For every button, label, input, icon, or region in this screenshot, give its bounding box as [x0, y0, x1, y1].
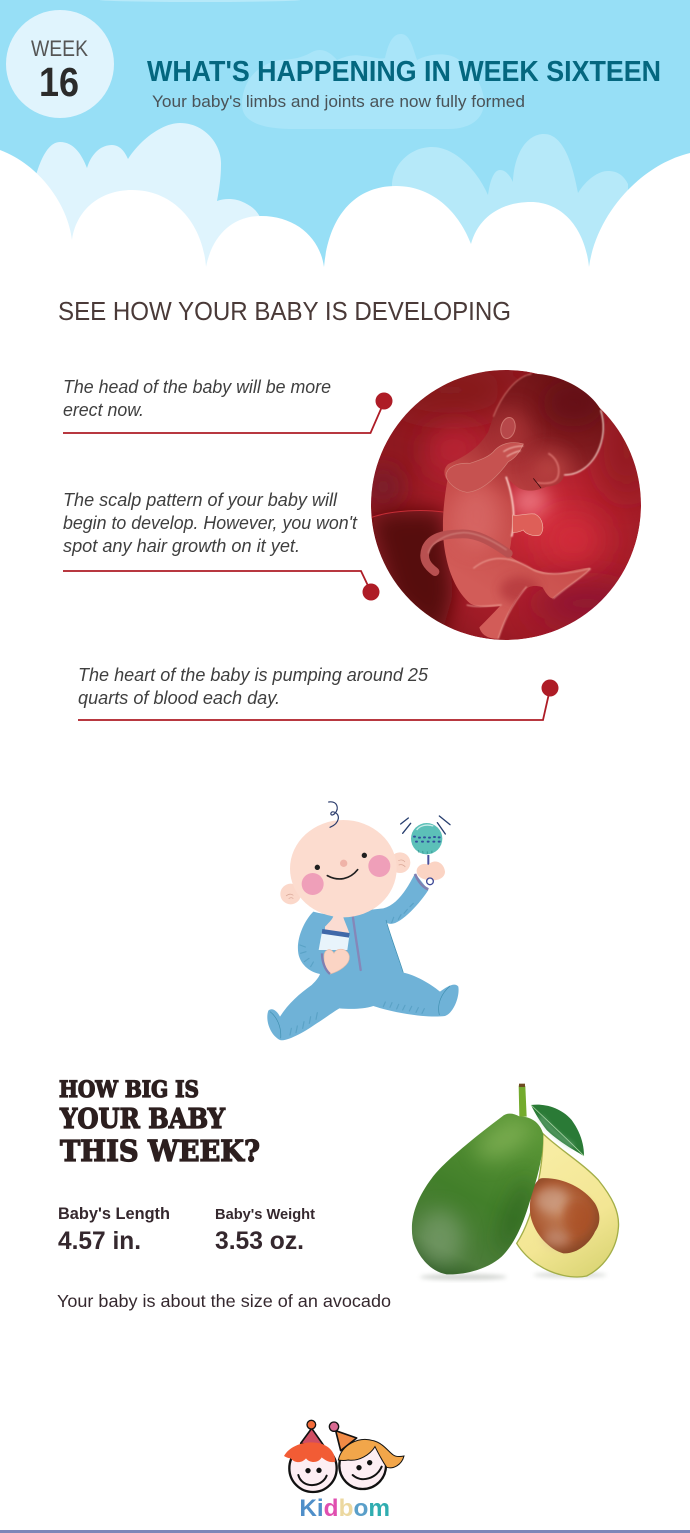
umbilical cord — [425, 534, 508, 572]
nose — [340, 860, 347, 867]
section heading: SEE HOW YOUR BABY IS DEVELOPING — [58, 296, 511, 326]
mouth — [533, 478, 541, 488]
right ear — [390, 852, 410, 873]
leaf vein — [531, 1105, 584, 1156]
bottle band — [322, 931, 349, 935]
rattle ball — [411, 823, 442, 854]
seed reddish patch — [563, 1200, 591, 1233]
girl face — [339, 1442, 386, 1489]
stat: weight — [215, 1206, 315, 1255]
stat label: Baby's Weight — [215, 1206, 315, 1223]
zipper — [353, 915, 361, 970]
hair curl — [329, 802, 338, 827]
pale cloud left — [30, 123, 263, 280]
stat value: 4.57 in. — [58, 1227, 141, 1255]
leader dot — [542, 680, 558, 696]
wordmark: Kidbom — [299, 1495, 390, 1522]
ear — [499, 416, 517, 440]
callout: head — [63, 377, 392, 433]
stem — [519, 1084, 527, 1117]
fingers — [503, 446, 523, 457]
callout line 1: The head of the baby will be more — [63, 377, 331, 397]
question heading — [59, 1077, 260, 1168]
forehead rim light — [493, 374, 532, 417]
rattle dots — [414, 837, 440, 842]
sleeve cuff — [415, 874, 428, 889]
chest glow — [506, 477, 514, 537]
cheeks — [302, 873, 324, 895]
shake marks — [401, 816, 450, 834]
bottle teat — [325, 911, 349, 933]
stat label: Baby's Length — [58, 1205, 170, 1223]
line 2: YOUR BABY — [59, 1104, 226, 1135]
leader line — [78, 689, 550, 720]
callout line 1: The scalp pattern of your baby will — [63, 490, 338, 510]
head rim light — [564, 410, 603, 475]
sky panel — [0, 0, 690, 285]
seed highlight — [535, 1187, 568, 1213]
leader line — [63, 402, 384, 433]
boy hair — [284, 1442, 335, 1462]
holding hand — [324, 949, 349, 974]
leg highlights — [467, 559, 591, 639]
line 1: HOW BIG IS — [59, 1077, 199, 1103]
girl eyes — [356, 1465, 362, 1470]
eyes — [315, 865, 320, 870]
raised hand — [417, 862, 445, 880]
boy face — [289, 1445, 337, 1492]
header: sky and clouds — [0, 0, 690, 300]
girl hair — [338, 1439, 404, 1468]
avocado half flesh — [517, 1133, 619, 1277]
callout line 2: quarts of blood each day. — [78, 688, 280, 708]
week number: 16 — [39, 59, 79, 105]
seed — [530, 1178, 599, 1253]
pale cloud right — [392, 134, 628, 270]
sleeping suit — [267, 873, 459, 1040]
stat value: 3.53 oz. — [215, 1227, 304, 1255]
sleeve cuff left — [322, 953, 330, 974]
ear folds — [286, 860, 405, 899]
week badge — [6, 10, 114, 118]
arm and hand near face — [446, 443, 523, 492]
leader dot — [362, 584, 380, 600]
line 3: THIS WEEK? — [60, 1134, 260, 1168]
rattle stick — [425, 855, 431, 878]
face — [537, 453, 559, 483]
boy eyes — [305, 1468, 311, 1473]
rattle shine — [417, 825, 433, 830]
avocado illustration — [407, 1084, 619, 1280]
callout: heart — [78, 665, 558, 720]
girl smile — [353, 1467, 382, 1479]
rattle lines — [418, 850, 432, 854]
faint cloud top edge — [100, 0, 300, 2]
badge circle — [6, 10, 114, 118]
callout line 1: The heart of the baby is pumping around 25 — [78, 665, 429, 685]
subtitle: Your baby's limbs and joints are now fully formed — [152, 92, 525, 111]
footer bar — [0, 1530, 690, 1533]
girl hat pompom — [329, 1422, 339, 1431]
suit stitches — [290, 903, 424, 1035]
smile — [327, 870, 358, 879]
leaf — [531, 1105, 584, 1156]
rattle ring — [427, 878, 433, 885]
bottle body — [319, 932, 349, 950]
boy hat pompom — [307, 1420, 316, 1429]
boy smile — [298, 1475, 327, 1485]
fetus body and shading — [440, 370, 610, 643]
callout: scalp — [63, 490, 380, 600]
seed lower highlight — [543, 1230, 570, 1247]
womb background — [367, 367, 650, 640]
cord highlight — [428, 533, 507, 553]
white cloud band — [0, 150, 690, 300]
head — [290, 820, 397, 917]
callout line 2: begin to develop. However, you won't — [63, 513, 358, 533]
stem tip — [519, 1084, 525, 1087]
callout line 2: erect now. — [63, 400, 144, 420]
second arm and fist — [513, 514, 543, 536]
whole avocado — [412, 1114, 544, 1274]
stat: length — [58, 1205, 170, 1255]
ground shadows — [420, 1274, 507, 1280]
faint cloud behind the title — [242, 34, 484, 129]
callout line 3: spot any hair growth on it yet. — [63, 536, 300, 556]
badge label: WEEK — [31, 36, 88, 61]
size comparison text: Your baby is about the size of an avocado — [57, 1291, 391, 1311]
fetus illustration — [367, 367, 650, 643]
logo — [284, 1420, 404, 1522]
left ear — [280, 884, 301, 904]
girl hat — [336, 1431, 357, 1451]
boy hat — [301, 1428, 325, 1447]
leader dot — [376, 392, 392, 410]
title: WHAT'S HAPPENING IN WEEK SIXTEEN — [147, 56, 661, 88]
baby illustration — [267, 802, 459, 1040]
suit creases — [270, 920, 450, 1038]
baby bottle — [319, 911, 349, 950]
leaf light — [540, 1117, 573, 1147]
leader line — [63, 571, 371, 592]
